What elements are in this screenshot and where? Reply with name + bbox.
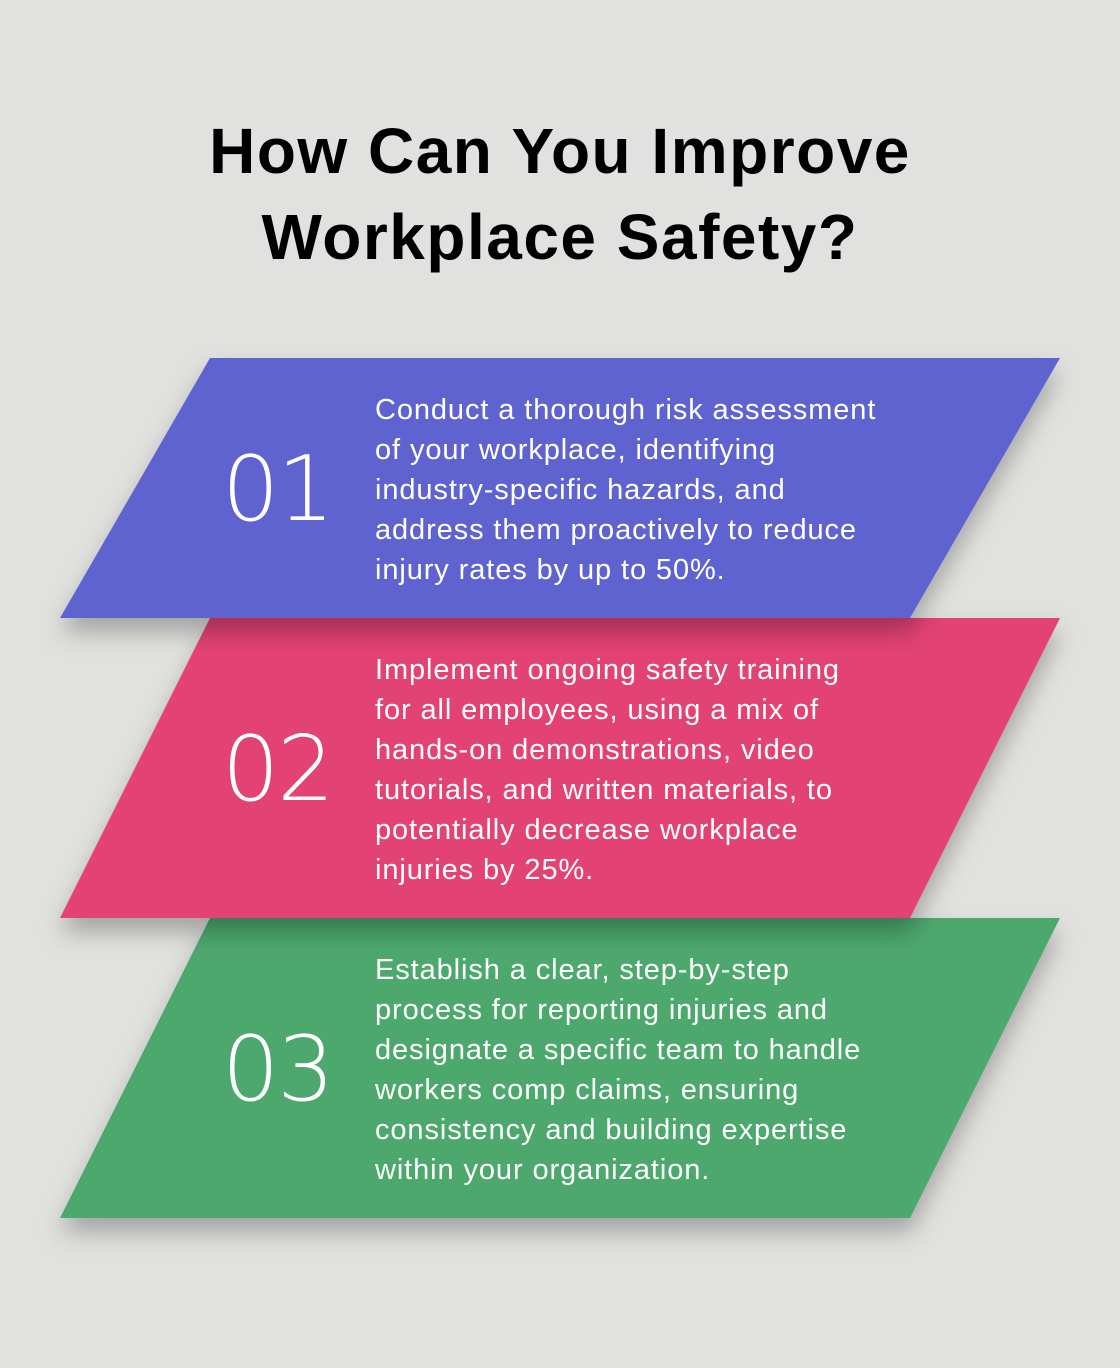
text step 2 (375, 654, 840, 886)
text step 1: address them proactively to reduce (375, 514, 857, 546)
text step 2: tutorials, and written materials, to (375, 774, 833, 806)
text step 3: Establish a clear, step-by-step (375, 954, 790, 986)
title: Workplace Safety? (262, 201, 858, 273)
text step 2: Implement ongoing safety training (375, 654, 840, 686)
text step 3: consistency and building expertise (375, 1114, 847, 1146)
text step 3: workers comp claims, ensuring (375, 1074, 799, 1106)
panel: step 2 (60, 618, 1060, 918)
text step 2: injuries by 25%. (375, 854, 594, 886)
title: How Can You Improve (209, 115, 911, 187)
text step 2: potentially decrease workplace (375, 814, 799, 846)
panel: step 1 (60, 358, 1060, 618)
text step 1: injury rates by up to 50%. (375, 554, 726, 586)
text step 1: of your workplace, identifying (375, 434, 776, 466)
title (209, 115, 911, 273)
text step 3: within your organization. (375, 1154, 710, 1186)
text step 2: for all employees, using a mix of (375, 694, 819, 726)
text step 3: designate a specific team to handle (375, 1034, 861, 1066)
number 03: 03 (222, 1017, 333, 1122)
text step 1 (375, 394, 876, 586)
text step 2: hands-on demonstrations, video (375, 734, 815, 766)
number 02: 02 (222, 717, 333, 822)
text step 3: process for reporting injuries and (375, 994, 828, 1026)
text step 1: industry-specific hazards, and (375, 474, 786, 506)
number 01: 01 (222, 437, 333, 542)
text step 3 (375, 954, 861, 1186)
text step 1: Conduct a thorough risk assessment (375, 394, 876, 426)
panel: step 3 (60, 918, 1060, 1218)
